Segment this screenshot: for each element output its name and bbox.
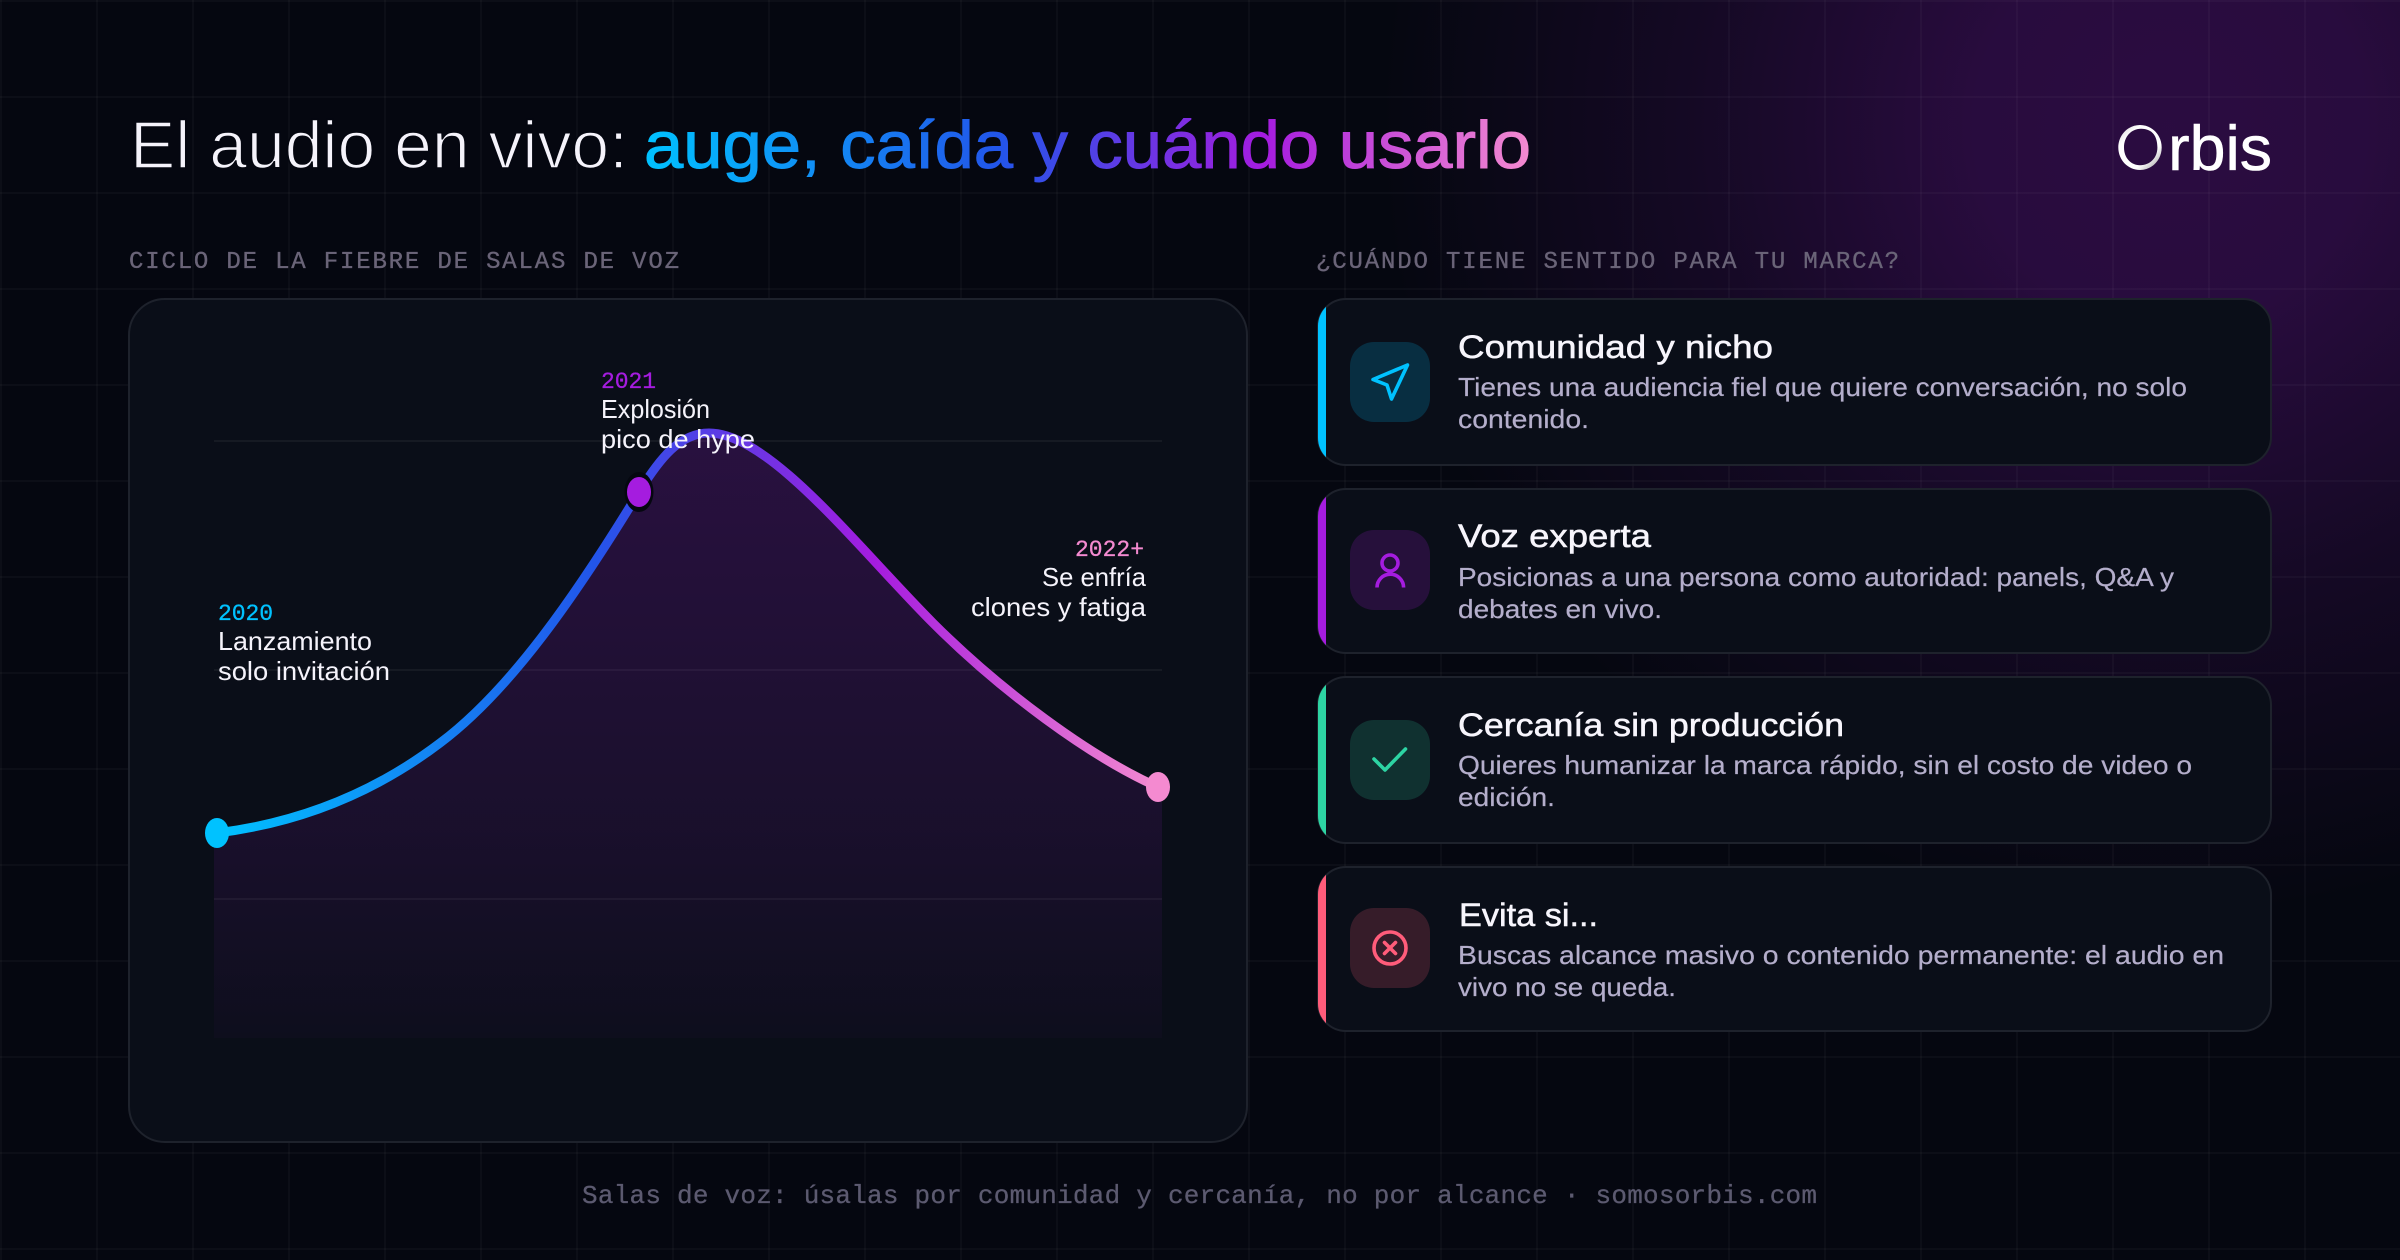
card text: Evita si... (1459, 897, 1598, 933)
label: 2021: Explosión (601, 394, 710, 424)
chart area fill (214, 433, 1162, 1038)
label: 2020: solo invitación (218, 656, 390, 686)
card text (1458, 897, 2224, 1002)
label: 2020 (218, 601, 390, 686)
label: 2022+: Se enfría (1042, 562, 1147, 592)
label: 2021 (601, 369, 755, 454)
title (130, 108, 1531, 183)
card: Evita si... (1318, 867, 2271, 1031)
card text: contenido. (1458, 404, 1589, 434)
card: Cercanía sin producción (1318, 677, 2271, 843)
point: 2021 (624, 472, 654, 512)
icon: navigation arrow (1350, 342, 1430, 422)
label: 2021: 2021 (601, 369, 656, 395)
label: 2020: Lanzamiento (218, 626, 372, 656)
card text (1458, 518, 2174, 624)
label: 2022+ (971, 537, 1147, 622)
label: 2022+: clones y fatiga (971, 592, 1147, 622)
card text: Quieres humanizar la marca rápido, sin el costo de video o (1458, 750, 2192, 780)
point: 2022+ (1146, 772, 1170, 802)
icon: check (1350, 720, 1430, 800)
label: 2022+: 2022+ (1075, 537, 1144, 563)
section heading: cards: ¿CUÁNDO TIENE SENTIDO PARA TU MARCA? (1316, 248, 1899, 276)
card text: Comunidad y nicho (1458, 329, 1773, 365)
footer: Salas de voz: úsalas por comunidad y cercanía, no por alcance · somosorbis.com (582, 1181, 1817, 1211)
icon: person (1350, 530, 1430, 610)
card text: Cercanía sin producción (1458, 707, 1844, 743)
card text: debates en vivo. (1458, 594, 1662, 624)
point: 2020 (205, 818, 229, 848)
card text: Tienes una audiencia fiel que quiere conversación, no solo (1458, 372, 2187, 402)
card: Voz experta (1318, 489, 2271, 653)
card: Comunidad y nicho (1318, 299, 2271, 465)
icon: x circle (1350, 908, 1430, 988)
card text (1458, 707, 2192, 812)
title: El audio en vivo: (130, 108, 628, 183)
chart curve (217, 433, 1158, 833)
card text: edición. (1458, 782, 1555, 812)
card text: Voz experta (1458, 518, 1651, 554)
card text: Posicionas a una persona como autoridad: panels, Q&A y (1458, 562, 2174, 592)
card text: vivo no se queda. (1458, 972, 1676, 1002)
label: 2020: 2020 (218, 601, 273, 627)
title: auge, caída y cuándo usarlo (644, 108, 1531, 183)
card text: Buscas alcance masivo o contenido permanente: el audio en (1458, 940, 2224, 970)
card text (1458, 329, 2187, 434)
panel: hype cycle chart (129, 299, 1247, 1142)
label: 2021: pico de hype (601, 424, 755, 454)
section heading: chart: CICLO DE LA FIEBRE DE SALAS DE VOZ (129, 249, 679, 276)
